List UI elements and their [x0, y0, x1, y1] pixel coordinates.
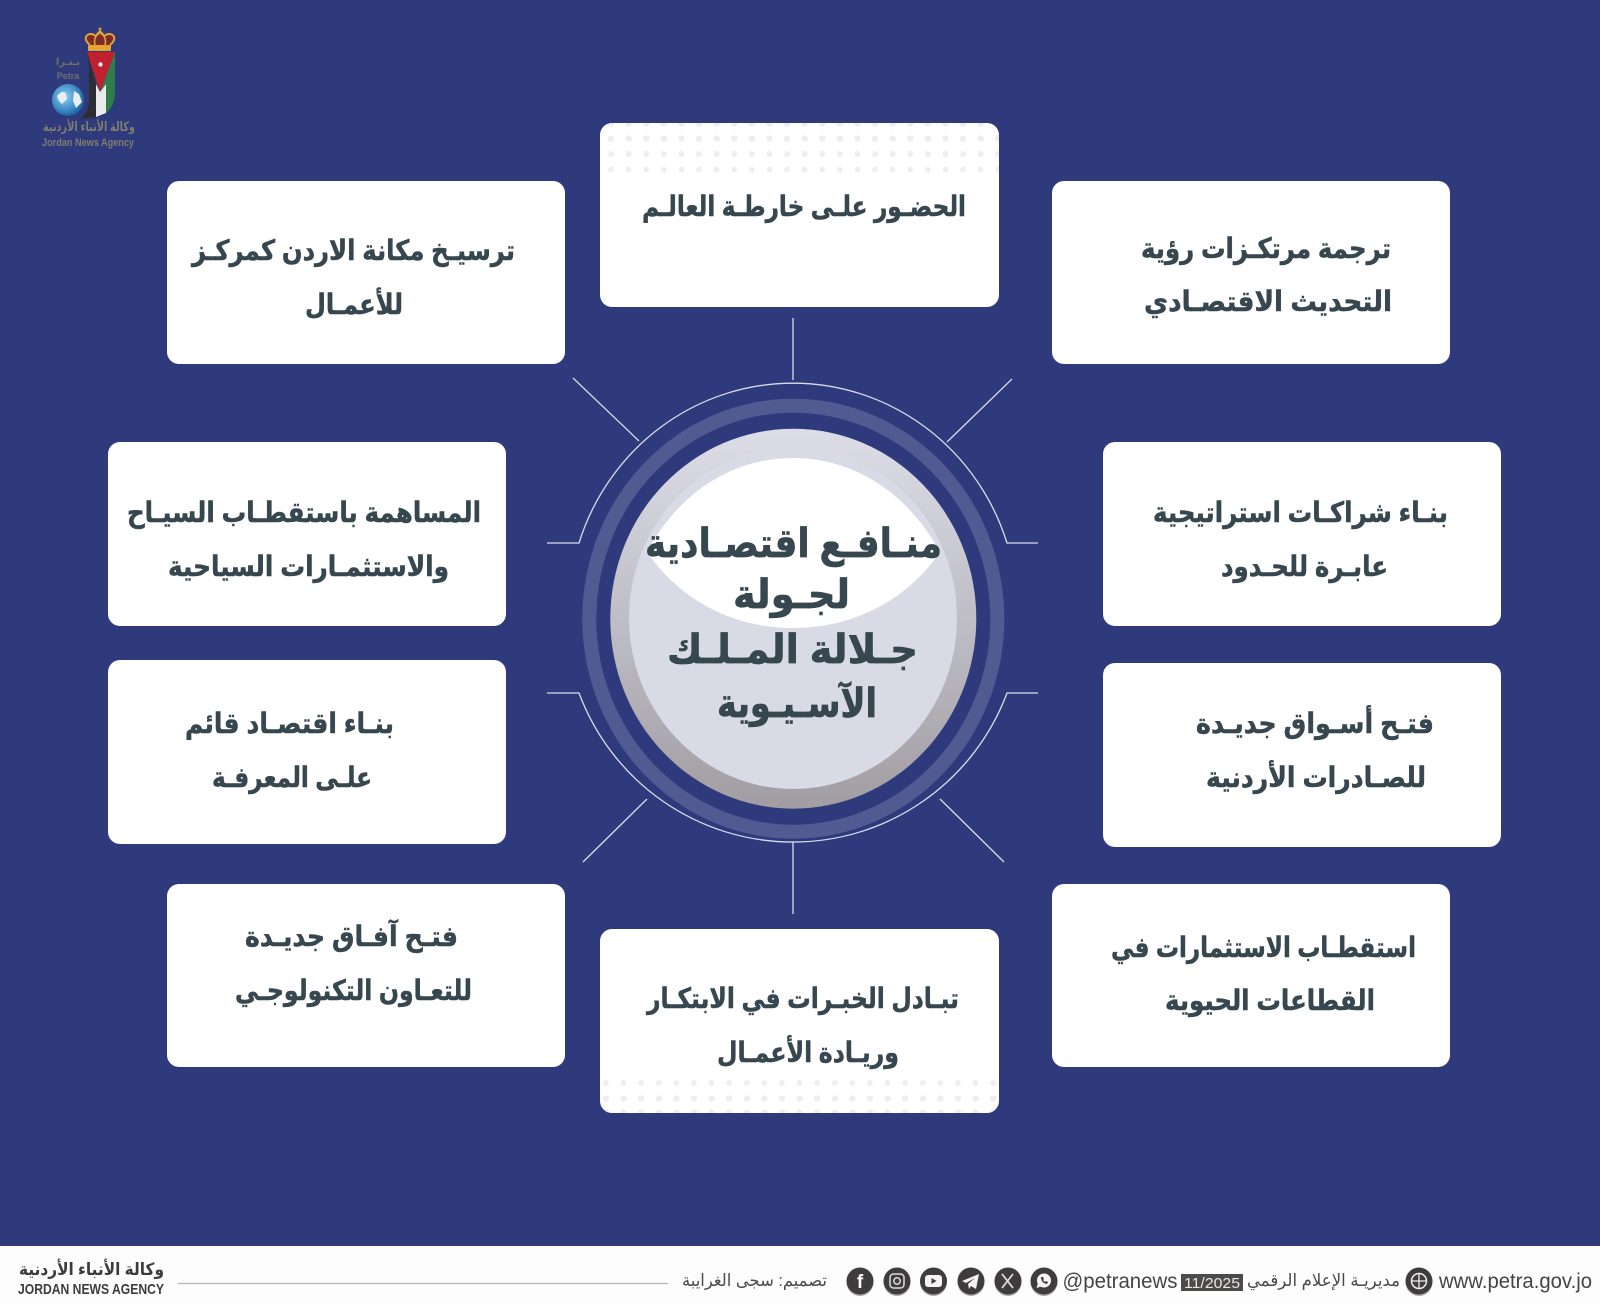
icon: whatsapp [1030, 1268, 1058, 1296]
white highlight [647, 458, 940, 628]
card text: بنـاء اقتصـاد قائم [185, 708, 394, 740]
card text: للتعـاون التكنولوجـي [235, 975, 472, 1007]
card text: الحضـور علـى خارطـة العالـم [642, 191, 966, 223]
department name: مديريـة الإعلام الرقمي [1247, 1271, 1400, 1291]
card: translating modernization vision [1052, 181, 1450, 364]
footer agency name: وكالة الأنباء الأردنية [19, 1259, 164, 1280]
card text: القطاعات الحيوية [1165, 985, 1375, 1017]
icon: facebook: f [857, 1272, 864, 1293]
icon: X [994, 1268, 1022, 1296]
card text [127, 497, 481, 583]
card text: وريـادة الأعمـال [717, 1035, 899, 1069]
card: knowledge economy [108, 660, 506, 844]
logo text [42, 57, 135, 149]
icon: crown [86, 28, 114, 51]
card text: استقطـاب الاستثمارات في [1111, 932, 1416, 964]
icon: globe [52, 84, 84, 116]
card text: للصـادرات الأردنية [1206, 760, 1426, 794]
footer agency name: JORDAN NEWS AGENCY [18, 1281, 164, 1298]
icon: youtube [920, 1268, 947, 1296]
card text [185, 708, 394, 794]
card: presence on the world map [600, 123, 999, 307]
icon: telegram [958, 1268, 984, 1296]
central title [645, 522, 942, 727]
logo text: وكالة الأنباء الأردنية [43, 118, 135, 134]
designer credit: تصميم: سجى الغرايبة [682, 1271, 827, 1291]
card text [645, 983, 959, 1069]
card text [1153, 497, 1448, 583]
card text: والاستثمـارات السياحية [168, 551, 449, 583]
card text [235, 919, 472, 1007]
card text [1141, 233, 1392, 318]
icon: instagram [884, 1268, 910, 1296]
card text [1111, 932, 1416, 1017]
central title: منـافـع اقتصـادية [645, 522, 942, 567]
card text: المساهمة باستقطـاب السيـاح [127, 497, 481, 529]
ring: light band [582, 399, 1004, 839]
card text: عابـرة للحـدود [1221, 551, 1388, 583]
card text: ترسيـخ مكانة الاردن كمركـز [190, 235, 515, 267]
dot pattern bottom [606, 1083, 999, 1112]
icon: facebook [846, 1268, 874, 1296]
card: attracting tourists [108, 442, 506, 626]
connector lines [547, 318, 1038, 914]
card text: التحديث الاقتصـادي [1144, 286, 1392, 318]
ring: grey gradient [610, 429, 976, 809]
card text: فتـح أسـواق جديـدة [1196, 705, 1434, 740]
card: technological cooperation [167, 884, 565, 1067]
card text: علـى المعرفـة [212, 762, 372, 794]
card: strategic partnerships [1103, 442, 1501, 626]
card: new markets [1103, 663, 1501, 847]
card text: للأعمـال [305, 287, 403, 320]
logo text: بـتـرا [56, 57, 80, 68]
card text: فتـح آفـاق جديـدة [245, 919, 458, 953]
card text [1196, 705, 1434, 794]
footer agency name [18, 1259, 164, 1298]
footer [0, 1246, 1600, 1304]
logo text: Petra [57, 71, 80, 81]
central title: الآسـيـوية [717, 681, 877, 727]
dot pattern top [611, 124, 999, 170]
card text: ترجمة مرتكـزات رؤية [1141, 233, 1391, 265]
website: www.petra.gov.jo [1438, 1270, 1592, 1293]
card: attracting investment [1052, 884, 1450, 1067]
logo text: Jordan News Agency [42, 137, 135, 149]
logo: Jordan News Agency [42, 28, 135, 149]
icon: web globe [1406, 1268, 1432, 1296]
icon: flag J [80, 52, 115, 119]
inner disc [629, 447, 957, 789]
central circle [582, 399, 1004, 839]
card: exchanging expertise [600, 929, 999, 1113]
central title: جـلالة المـلـك [667, 628, 918, 672]
social handle: @petranews [1062, 1270, 1178, 1293]
card text: بنـاء شراكـات استراتيجية [1153, 497, 1448, 529]
date badge: 11/2025 [1184, 1275, 1240, 1292]
card text: تبـادل الخبـرات في الابتكـار [645, 983, 959, 1015]
central title: لجـولة [733, 573, 850, 618]
card: consolidating Jordan's position [167, 181, 565, 364]
card text [190, 235, 515, 320]
